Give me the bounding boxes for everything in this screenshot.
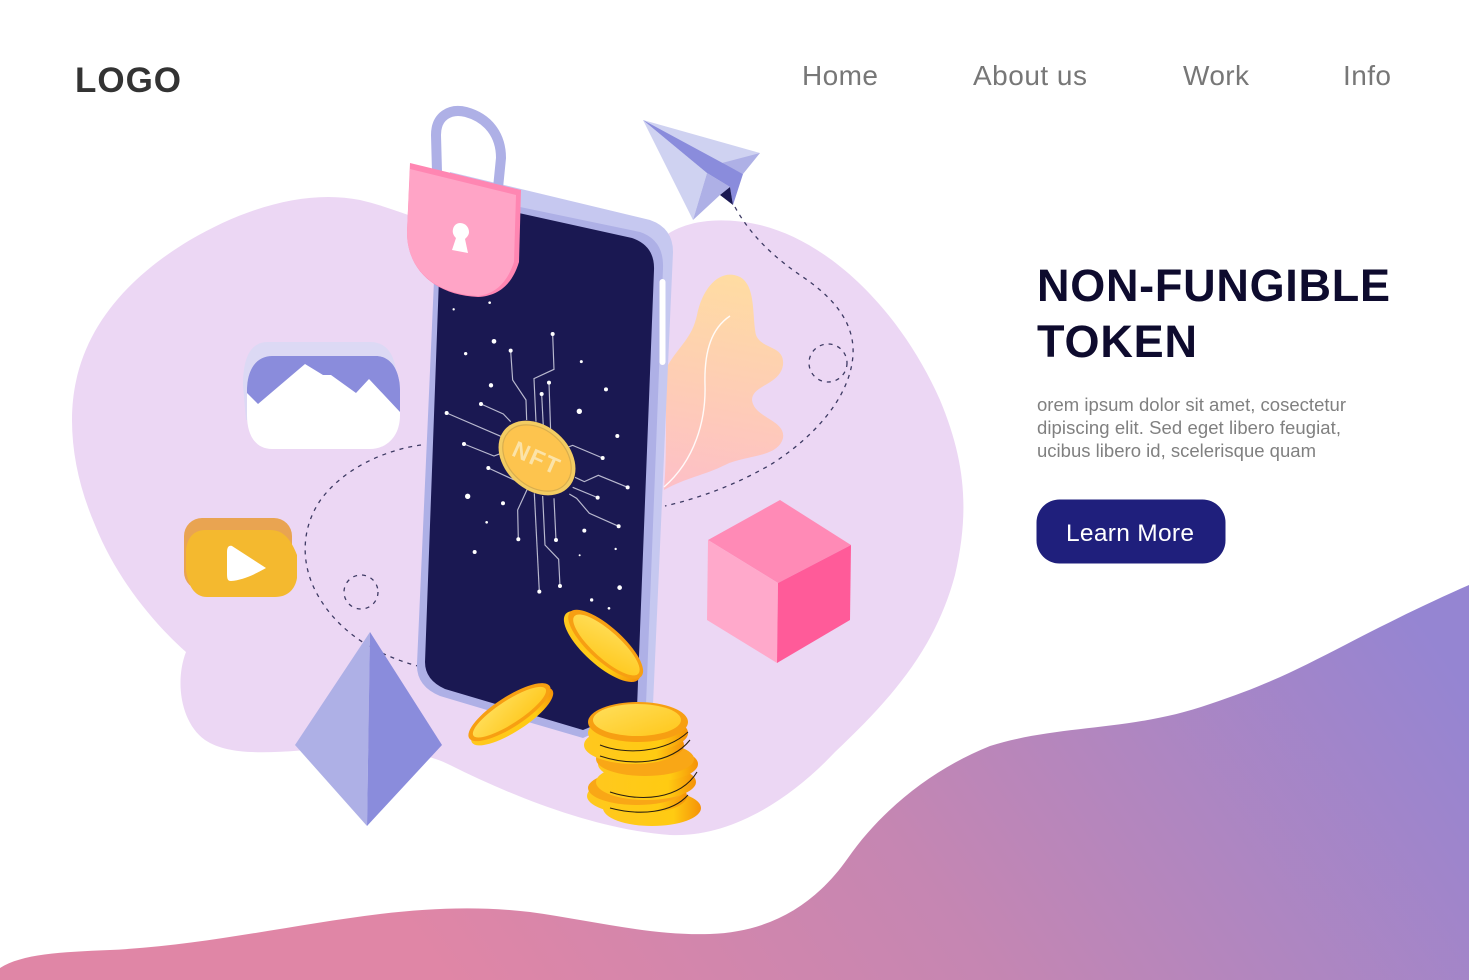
dashed path left xyxy=(305,445,421,666)
icon: play button xyxy=(184,518,297,597)
circuit lines xyxy=(447,334,628,592)
lock body front xyxy=(407,169,516,296)
icon: picture xyxy=(243,342,400,449)
lock body side xyxy=(407,163,521,297)
learn more button: Learn More xyxy=(1066,520,1194,547)
lock keyhole xyxy=(452,223,469,253)
navigation xyxy=(802,60,1391,91)
icon: ethereum pyramid xyxy=(295,632,442,826)
background wave xyxy=(0,585,1469,980)
padlock xyxy=(407,111,521,297)
falling coin upper xyxy=(554,598,653,693)
icon: cube xyxy=(707,500,851,663)
dashed loop left xyxy=(344,575,378,609)
stack coin 6 xyxy=(603,790,701,826)
body text xyxy=(1037,394,1346,461)
body text: ucibus libero id, scelerisque quam xyxy=(1037,440,1316,461)
stack coin 2 xyxy=(584,726,690,764)
stack coin 5 xyxy=(587,771,688,814)
stack coin 1 xyxy=(588,702,688,752)
stack coin 3 xyxy=(596,742,698,782)
screen dots xyxy=(445,301,630,610)
learn more button xyxy=(1036,500,1226,564)
heading: NON-FUNGIBLE xyxy=(1037,260,1390,311)
logo: LOGO xyxy=(75,61,181,100)
phone screen xyxy=(425,196,654,730)
body text: dipiscing elit. Sed eget libero feugiat, xyxy=(1037,417,1341,438)
nav: about us: About us xyxy=(973,60,1087,91)
NFT coin xyxy=(484,405,590,511)
stack coin 4 xyxy=(596,764,697,800)
lock shackle xyxy=(436,111,501,188)
phone xyxy=(417,172,673,738)
nav: info: Info xyxy=(1343,60,1391,91)
nav: work: Work xyxy=(1183,60,1250,91)
decorative leaf xyxy=(664,275,783,490)
heading: TOKEN xyxy=(1037,316,1197,367)
dashed path right xyxy=(665,207,853,506)
dashed loop right xyxy=(809,344,847,382)
nav: home: Home xyxy=(802,60,878,91)
phone side button xyxy=(660,279,666,365)
heading xyxy=(1037,260,1390,367)
phone back edge xyxy=(440,172,673,705)
falling coin lower xyxy=(461,673,561,755)
NFT coin: NFT xyxy=(509,436,565,480)
body text: orem ipsum dolor sit amet, cosectetur xyxy=(1037,394,1346,415)
phone frame xyxy=(417,190,663,738)
coin stack xyxy=(584,702,701,826)
paper plane xyxy=(643,120,760,220)
lilac background blob xyxy=(72,197,963,835)
